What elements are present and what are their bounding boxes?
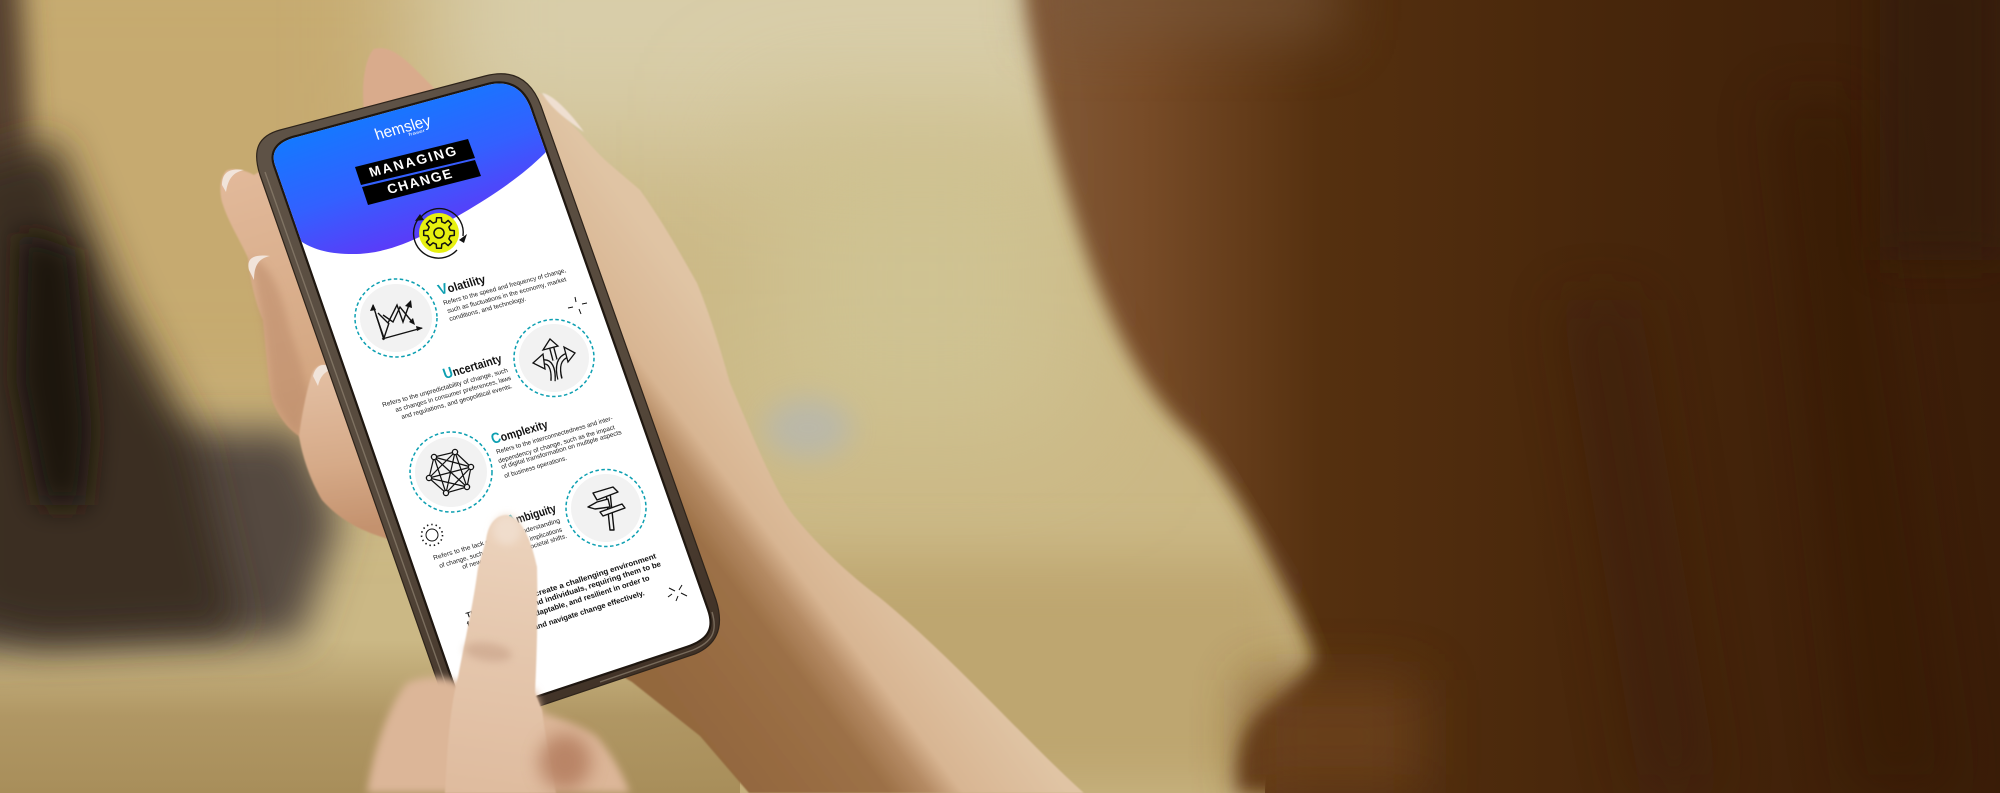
- summary text: flexible, adaptable, and resilient in order to: [501, 573, 651, 628]
- finger behind phone top: [363, 48, 450, 120]
- screen background: [274, 84, 710, 696]
- body text: of new technologies or societal shifts.: [461, 533, 568, 571]
- nail on palm side: [542, 93, 584, 132]
- phone: [256, 73, 720, 706]
- body text: of change, such as the uncertain implications: [438, 527, 563, 570]
- body text: Refers to the speed and frequency of change,: [442, 267, 567, 307]
- body text: of business operations.: [503, 455, 568, 480]
- title: CHANGE: [385, 166, 454, 197]
- logo: fraser: [408, 128, 427, 137]
- summary text: anticipate and navigate change effectively.: [497, 588, 646, 643]
- heading: Volatility: [436, 270, 488, 299]
- pointing finger and second hand: [367, 515, 630, 793]
- body text: Refers to the interconnectedness and inter-: [495, 415, 614, 456]
- body text: [442, 267, 568, 323]
- decoration: sun ring: [422, 524, 442, 546]
- fingertip highlight: [493, 515, 521, 545]
- icon: branching arrows: [514, 320, 594, 396]
- summary text: for organizations and individuals, requiring them to be: [466, 559, 662, 629]
- woman's head, blurred foreground: [1021, 0, 2000, 793]
- frame highlight: [265, 172, 714, 697]
- hand holding the phone: [220, 48, 1084, 793]
- left fingers: [220, 169, 400, 500]
- lower shade: [539, 734, 591, 790]
- title: [355, 139, 481, 205]
- heading: Uncertainty: [441, 350, 504, 383]
- section: ambiguity: [432, 470, 646, 571]
- heading: Ambiguity: [505, 499, 558, 530]
- section: complexity: [410, 415, 623, 512]
- summary text: These four factors create a challenging environment: [465, 551, 658, 620]
- fingernails: [222, 170, 334, 386]
- heading: Complexity: [489, 415, 550, 448]
- palm and forearm: [538, 92, 1084, 793]
- body text: conditions, and technology.: [448, 296, 527, 323]
- logo: [374, 117, 430, 140]
- knuckle crease: [463, 640, 513, 664]
- body text: and regulations, and geopolitical events.: [400, 383, 514, 421]
- body text: Refers to the lack of clarity or understanding: [432, 517, 562, 562]
- decoration: sparkle: [568, 297, 587, 314]
- phone inner bezel: [274, 84, 709, 713]
- logo: hemsley: [373, 113, 433, 144]
- icon: network: [410, 432, 492, 512]
- icon: signpost: [566, 470, 646, 546]
- section: volatility: [355, 267, 568, 357]
- screen: [274, 84, 710, 696]
- index finger: [445, 515, 556, 793]
- body text: such as fluctuations in the economy, market: [446, 276, 568, 315]
- body text: of digital transformation on multiple aspects: [500, 429, 623, 471]
- body text: [495, 415, 623, 480]
- section: uncertainty: [381, 320, 594, 421]
- body text: Refers to the unpredictability of change, such: [381, 367, 509, 409]
- body text: dependency of change, such as the impact: [497, 424, 616, 465]
- lower hand: [367, 677, 630, 793]
- body text: as changes in consumer preferences, laws: [394, 375, 512, 414]
- phone frame: [257, 74, 719, 728]
- icon: gear with rotating arrows: [414, 209, 467, 258]
- third finger: [299, 365, 420, 545]
- header blue blob: [274, 84, 546, 254]
- icon: line chart: [355, 279, 437, 357]
- finger shading: [250, 258, 310, 436]
- title: MANAGING: [367, 143, 458, 180]
- decoration: burst: [668, 585, 687, 601]
